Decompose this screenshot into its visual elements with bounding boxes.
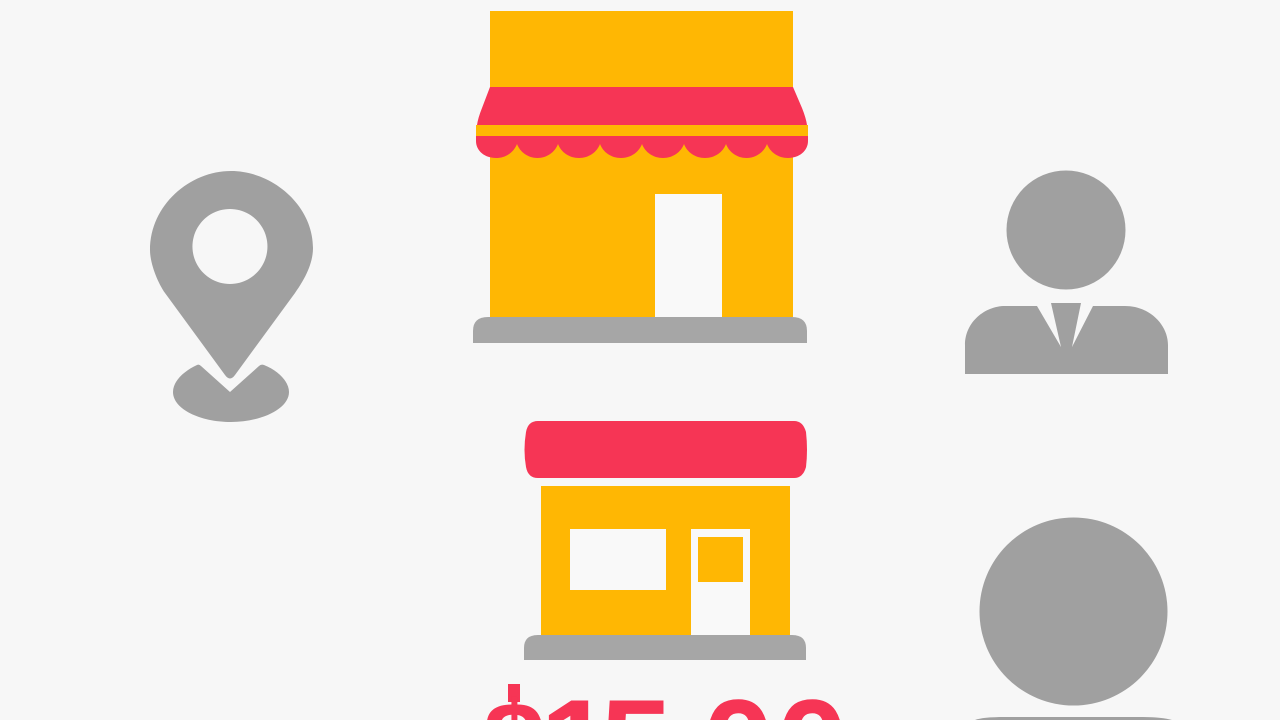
shop door: [691, 529, 750, 636]
shop base: [524, 635, 806, 660]
base: [473, 317, 807, 343]
icon: person, cropped: [975, 518, 1172, 720]
icon: location pin: [150, 171, 313, 422]
icon: person in suit: [965, 170, 1168, 374]
icon: large storefront with awning: [473, 11, 808, 343]
shop window: [570, 529, 666, 590]
awning: [476, 87, 808, 158]
door: [655, 194, 722, 317]
icon: small shop: [524, 421, 807, 660]
